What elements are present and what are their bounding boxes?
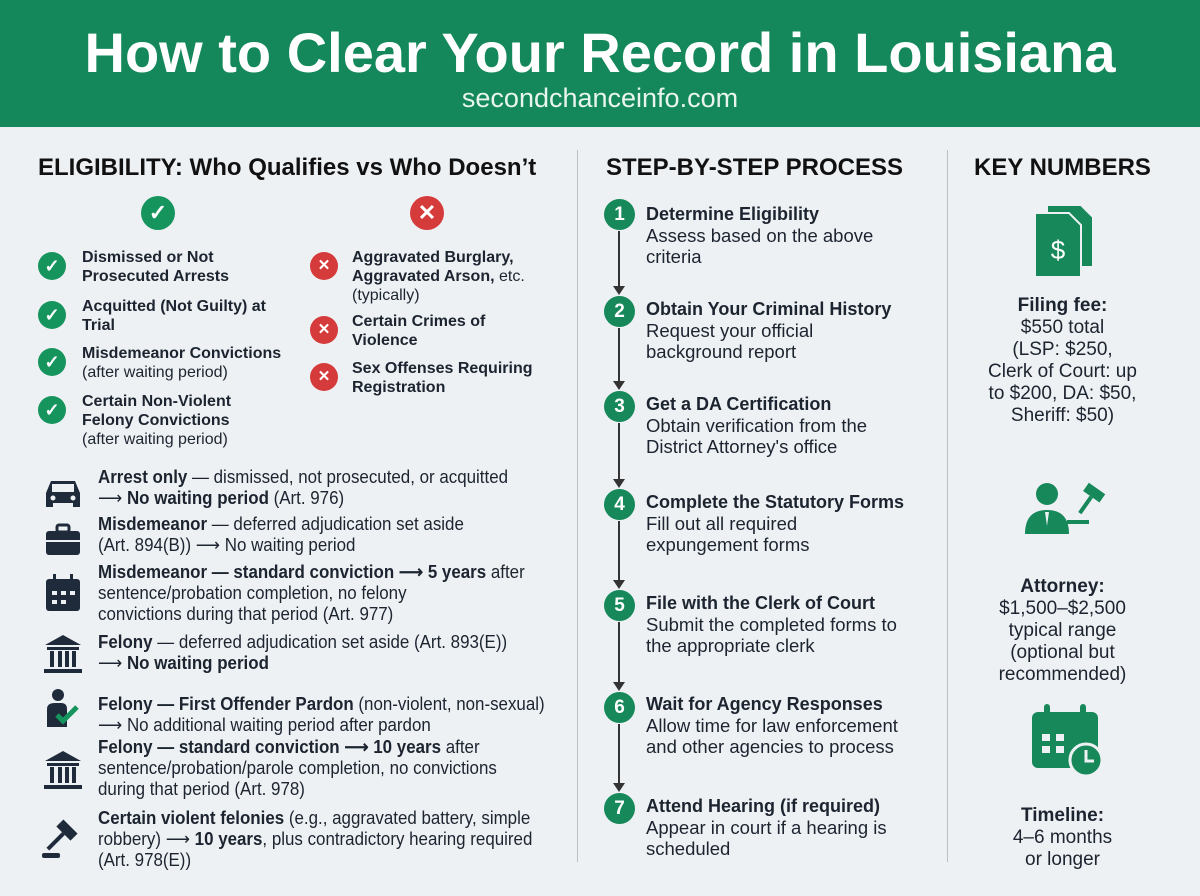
rules list: (Art. 894(B)) ⟶ No waiting period	[98, 535, 355, 555]
heading process: STEP-BY-STEP PROCESS	[606, 154, 903, 181]
qualifies list: Misdemeanor Convictions	[82, 345, 281, 362]
text: Get a DA Certification	[646, 394, 831, 414]
text: Wait for Agency Responses	[646, 694, 883, 714]
text attorney: (optional but	[1010, 642, 1115, 663]
text: Submit the completed forms to	[646, 614, 897, 635]
text filing fee: Filing fee:	[1018, 295, 1107, 316]
qualifies list: ✓	[44, 256, 60, 276]
excluded list: ✕	[318, 257, 330, 274]
excluded list: ✕	[318, 368, 330, 385]
step 7: 7	[614, 798, 625, 819]
subtitle: secondchanceinfo.com	[462, 83, 738, 113]
qualifies list: (after waiting period)	[82, 364, 228, 381]
rules list: ⟶ No additional waiting period after pardon	[98, 715, 431, 735]
qualifies list: Acquitted (Not Guilty) at	[82, 298, 266, 315]
header banner	[0, 0, 1200, 127]
icon: big check: ✓	[149, 200, 167, 225]
text timeline: 4–6 months	[1013, 827, 1112, 848]
qualifies list: ✓	[44, 305, 60, 325]
text: Assess based on the above	[646, 225, 873, 246]
icon: calendar	[46, 574, 80, 611]
heading key numbers: KEY NUMBERS	[974, 154, 1151, 181]
text filing fee: to $200, DA: $50,	[989, 383, 1136, 404]
step 1: 1	[614, 204, 625, 225]
step 5: 5	[614, 595, 625, 616]
text filing fee: $550 total	[1021, 317, 1104, 338]
icon: gavel	[42, 820, 78, 858]
text: Request your official	[646, 320, 813, 341]
text: Allow time for law enforcement	[646, 715, 898, 736]
text: criteria	[646, 246, 702, 267]
heading eligibility: ELIGIBILITY: Who Qualifies vs Who Doesn’t	[38, 154, 536, 181]
rules list: during that period (Art. 978)	[98, 779, 305, 799]
step 6	[604, 692, 635, 723]
text: Complete the Statutory Forms	[646, 492, 904, 512]
text attorney: $1,500–$2,500	[999, 598, 1126, 619]
text: File with the Clerk of Court	[646, 593, 875, 613]
step 4	[604, 489, 635, 520]
step 2: 2	[614, 301, 625, 322]
text attorney: recommended)	[999, 664, 1126, 685]
text filing fee: Sheriff: $50)	[1011, 405, 1114, 426]
qualifies list: ✓	[44, 352, 60, 372]
icon: courthouse	[44, 635, 82, 673]
icon: courthouse 2	[44, 751, 82, 789]
text timeline: Timeline:	[1021, 805, 1104, 826]
qualifies list: Prosecuted Arrests	[82, 268, 229, 285]
text filing fee: Clerk of Court: up	[988, 361, 1137, 382]
qualifies list: Certain Non-Violent	[82, 393, 231, 410]
rules list: ⟶ No waiting period (Art. 976)	[98, 488, 344, 508]
rules list: Felony — standard conviction ⟶ 10 years after	[98, 737, 480, 757]
text: expungement forms	[646, 534, 810, 555]
icon: big x	[410, 196, 444, 230]
qualifies list	[38, 249, 281, 448]
qualifies list: Felony Convictions	[82, 412, 230, 429]
text: and other agencies to process	[646, 736, 894, 757]
excluded list: Certain Crimes of	[352, 313, 485, 330]
step 3: 3	[614, 396, 625, 417]
rules list: Certain violent felonies (e.g., aggravated battery, simple	[98, 808, 530, 828]
step 6: 6	[614, 697, 625, 718]
text: Obtain Your Criminal History	[646, 299, 891, 319]
rules list: sentence/probation/parole completion, no convictions	[98, 758, 497, 778]
excluded list: ✕	[318, 321, 330, 338]
excluded list: Aggravated Arson, etc.	[352, 268, 525, 285]
icon: attorney gavel	[1025, 482, 1106, 534]
icon: briefcase	[46, 524, 80, 555]
excluded list: Sex Offenses Requiring	[352, 360, 532, 377]
icon: fee document	[1036, 206, 1092, 276]
rules list	[42, 467, 545, 870]
text: Appear in court if a hearing is	[646, 817, 887, 838]
rules list: robbery) ⟶ 10 years, plus contradictory hearing required	[98, 829, 532, 849]
qualifies list: Trial	[82, 317, 115, 334]
text: scheduled	[646, 838, 730, 859]
rules list: sentence/probation completion, no felony	[98, 583, 407, 603]
step 1	[604, 199, 635, 230]
text: Determine Eligibility	[646, 204, 819, 224]
text: Attend Hearing (if required)	[646, 796, 880, 816]
excluded list: Violence	[352, 332, 418, 349]
panel: eligibility	[38, 154, 545, 870]
icon: big check	[141, 196, 175, 230]
rules list: Arrest only — dismissed, not prosecuted, or acquitted	[98, 467, 508, 487]
rules list: Felony — First Offender Pardon (non-violent, non-sexual)	[98, 694, 545, 714]
step 7	[604, 793, 635, 824]
icon: big x: ✕	[418, 200, 436, 225]
text timeline: or longer	[1025, 849, 1100, 870]
rules list: (Art. 978(E))	[98, 850, 191, 870]
text filing fee	[988, 295, 1137, 426]
rules list: Misdemeanor — deferred adjudication set aside	[98, 514, 464, 534]
qualifies list: ✓	[44, 400, 60, 420]
rules list: Felony — deferred adjudication set aside (Art. 893(E))	[98, 632, 507, 652]
text attorney: Attorney:	[1020, 576, 1105, 597]
excluded list	[310, 249, 532, 396]
text filing fee: (LSP: $250,	[1012, 339, 1113, 360]
text: the appropriate clerk	[646, 635, 815, 656]
step 3	[604, 391, 635, 422]
rules list: Misdemeanor — standard conviction ⟶ 5 years after	[98, 562, 525, 582]
panel: key numbers	[974, 154, 1151, 870]
title: How to Clear Your Record in Louisiana	[85, 21, 1115, 84]
text attorney	[999, 576, 1126, 685]
step 5	[604, 590, 635, 621]
step 2	[604, 296, 635, 327]
text: Obtain verification from the	[646, 415, 867, 436]
text attorney: typical range	[1009, 620, 1116, 641]
icon: fee document: $	[1051, 235, 1066, 265]
icon: person with check	[47, 689, 79, 727]
excluded list: Aggravated Burglary,	[352, 249, 514, 266]
icon: car	[46, 481, 80, 507]
qualifies list: Dismissed or Not	[82, 249, 214, 266]
text timeline	[1013, 805, 1112, 870]
excluded list: Registration	[352, 379, 445, 396]
step 4: 4	[614, 494, 625, 515]
rules list: ⟶ No waiting period	[98, 653, 269, 673]
qualifies list: (after waiting period)	[82, 431, 228, 448]
text: Fill out all required	[646, 513, 797, 534]
text: background report	[646, 341, 796, 362]
text: District Attorney's office	[646, 436, 837, 457]
icon: calendar clock	[1032, 704, 1100, 774]
rules list: convictions during that period (Art. 977)	[98, 604, 393, 624]
excluded list: (typically)	[352, 287, 420, 304]
